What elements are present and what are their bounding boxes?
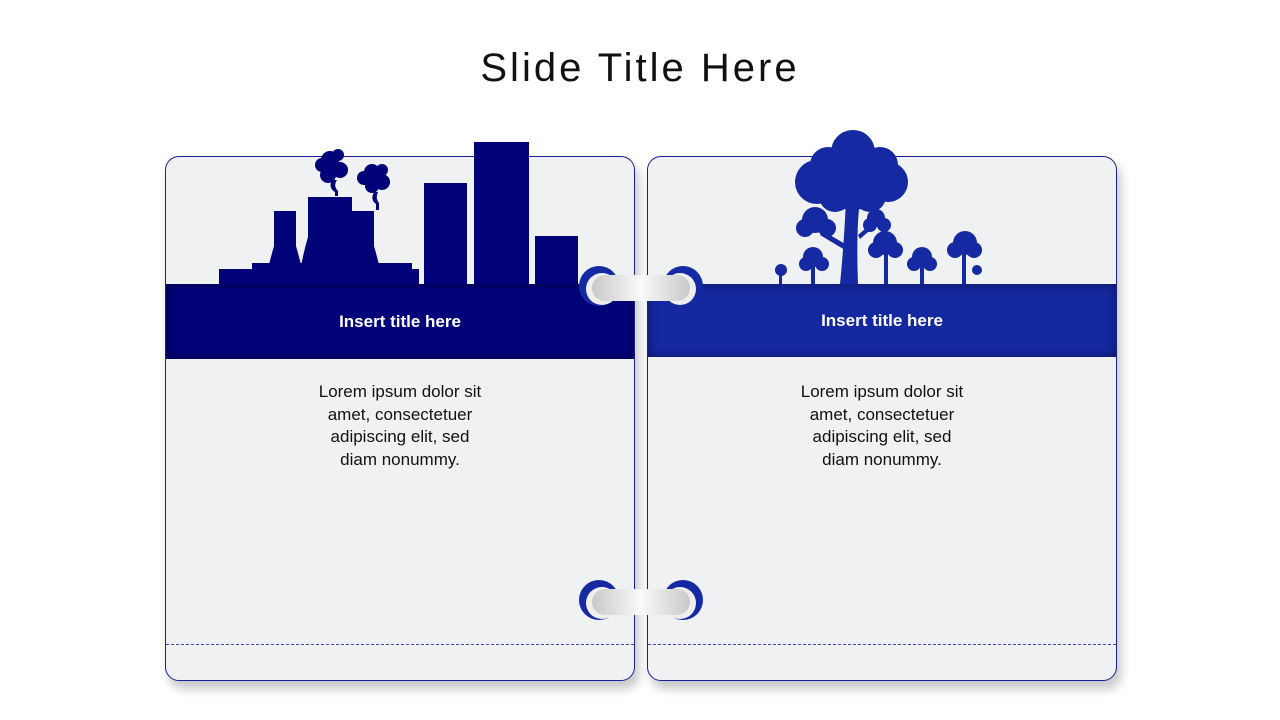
text block: right: amet, consectetuer — [810, 404, 954, 424]
text block: right: Lorem ipsum dolor sit — [801, 382, 963, 401]
title: Slide Title Here — [480, 46, 800, 90]
band: left title — [166, 284, 634, 359]
text block: left: amet, consectetuer — [328, 404, 472, 424]
band: right title: Insert title here — [821, 311, 943, 330]
text block: left: adipiscing elit, sed — [331, 427, 469, 446]
text block: right: diam nonummy. — [822, 450, 942, 468]
text block: right — [801, 382, 964, 468]
text block: left — [319, 382, 482, 468]
text block: left: Lorem ipsum dolor sit — [319, 382, 481, 401]
text block: right: adipiscing elit, sed — [813, 427, 951, 446]
band: right title — [648, 284, 1116, 357]
text block: left: diam nonummy. — [340, 450, 460, 468]
panel: left card — [165, 156, 635, 681]
band: left title: Insert title here — [339, 312, 461, 331]
panel: right card — [647, 156, 1117, 681]
